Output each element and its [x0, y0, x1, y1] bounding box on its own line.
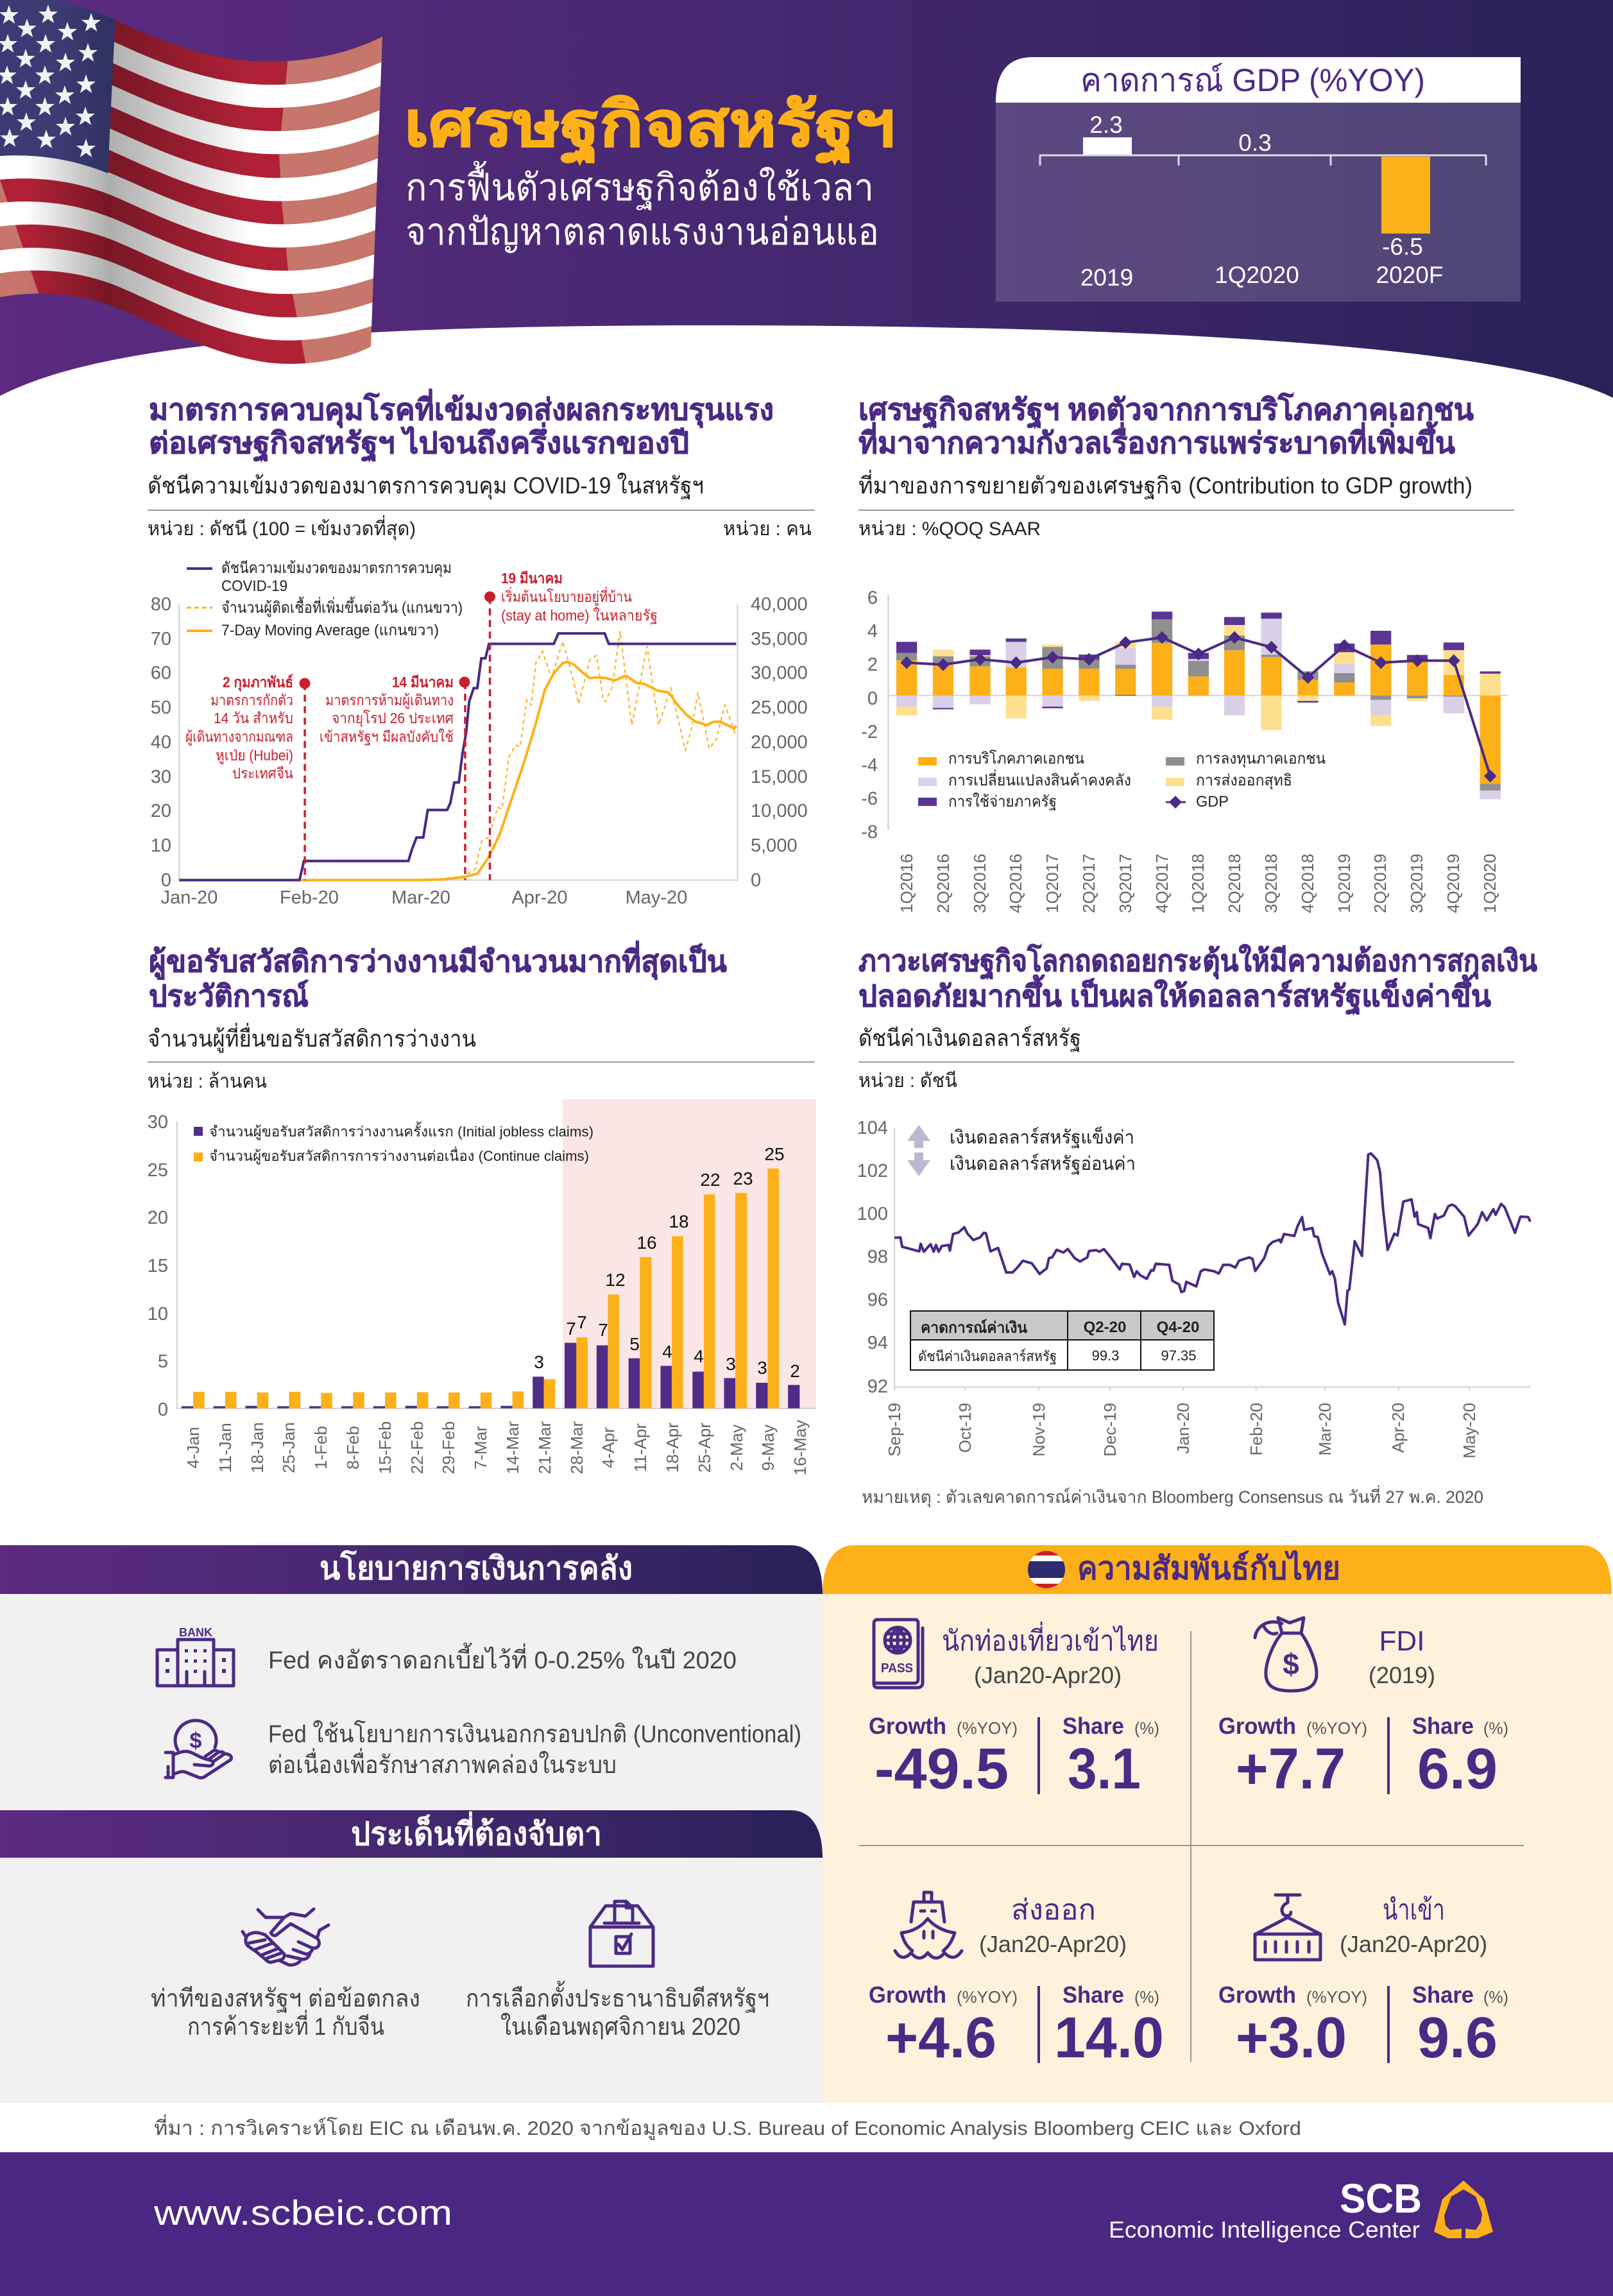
x axis labels: 9-May [758, 1425, 778, 1471]
tourists block: Growth [869, 1713, 946, 1739]
SCB wordmark: SCB [1340, 2175, 1422, 2222]
forecast table: ดัชนีค่าเงินดอลลาร์สหรัฐ [918, 1348, 1057, 1365]
GDP values: 2.3 [1089, 112, 1123, 138]
axis labels: 60 [151, 663, 171, 683]
x axis labels: 4Q2017 [1152, 853, 1172, 913]
x axis labels [885, 1403, 1479, 1459]
x axis labels: 18-Jan [248, 1422, 267, 1473]
legend: การส่งออกสุทธิ [1196, 772, 1292, 790]
icon: ship [895, 1892, 962, 1958]
x axis labels: Dec-19 [1100, 1403, 1120, 1457]
bar values: 7 [566, 1319, 576, 1339]
policy header [0, 1545, 823, 1594]
bar values: 4 [694, 1346, 704, 1366]
bar values: 4 [662, 1342, 672, 1362]
annotation: 2 February: 14 วัน สำหรับ [214, 710, 293, 726]
heading: มาตรการควบคุมโรคที่เข้มงวดส่งผลกระทบรุนแรง [149, 389, 774, 428]
imports block: Share [1412, 1982, 1474, 2008]
watch item 2: การเลือกตั้งประธานาธิบดีสหรัฐฯ [466, 1980, 769, 2013]
x axis labels: 4-Apr [599, 1427, 618, 1468]
x axis labels: 16-May [790, 1420, 810, 1475]
source note: ที่มา : การวิเคราะห์โดย EIC ณ เดือนพ.ค. 2020 จากข้อมูลของ U.S. Bureau of Economic Analysis Bloomberg CEIC และ Oxford [154, 2114, 1301, 2140]
website: www.scbeic.com [153, 2193, 452, 2232]
exports block: (%) [1134, 1987, 1159, 2007]
legend: ดัชนีความเข้มงวดของมาตรการควบคุม [221, 560, 452, 578]
exports block: Share [1063, 1982, 1124, 2008]
axis labels: 0 [161, 870, 171, 891]
x axis labels: 2Q2018 [1225, 853, 1244, 913]
axis labels: Feb-20 [280, 887, 339, 908]
exports block: (Jan20-Apr20) [979, 1931, 1127, 1957]
forecast table: 97.35 [1161, 1348, 1197, 1364]
imports block: (%YOY) [1306, 1987, 1367, 2007]
annotation: 2 February: มาตรการกักตัว [210, 692, 293, 708]
axis labels: 35,000 [751, 629, 808, 649]
bar values: 23 [733, 1169, 753, 1188]
arrow legend: เงินดอลลาร์สหรัฐแข็งค่า [950, 1126, 1134, 1149]
SCB wordmark: Economic Intelligence Center [1109, 2216, 1420, 2243]
x axis labels: 3Q2016 [970, 853, 989, 913]
forecast table: 99.3 [1092, 1348, 1119, 1364]
header background [0, 0, 1613, 411]
policy text 2: ต่อเนื่องเพื่อรักษาสภาพคล่องในระบบ [268, 1748, 617, 1779]
y axis labels: 92 [867, 1376, 888, 1397]
subheading: ดัชนีความเข้มงวดของมาตรการควบคุม COVID-19 ในสหรัฐฯ [148, 472, 704, 500]
x axis labels: 2-May [727, 1425, 746, 1471]
legend: COVID-19 [221, 578, 287, 595]
legend: การเปลี่ยนแปลงสินค้าคงคลัง [948, 769, 1131, 789]
axis labels: 30,000 [751, 663, 808, 683]
y axis labels [857, 1118, 888, 1397]
annotation: 2 February: หูเป่ย (Hubei) [216, 747, 293, 764]
y axis labels: 0 [867, 689, 878, 709]
FDI block: (%) [1483, 1718, 1508, 1738]
bar values: 7 [598, 1320, 608, 1340]
x axis labels: May-20 [1460, 1403, 1479, 1459]
stacked bar chart [888, 595, 1508, 830]
FDI block: Growth [1218, 1713, 1296, 1739]
forecast table: Q4-20 [1157, 1319, 1199, 1336]
FDI block: Share [1412, 1713, 1474, 1739]
x axis labels: Sep-19 [885, 1403, 904, 1457]
x axis labels: 15-Feb [375, 1421, 395, 1474]
heading: ภาวะเศรษฐกิจโลกถดถอยกระตุ้นให้มีความต้องการสกุลเงิน [858, 943, 1537, 980]
x axis labels: 4-Jan [183, 1426, 203, 1469]
icon: coin and hand [166, 1720, 232, 1778]
policy text 2: Fed ใช้นโยบายการเงินนอกกรอบปกติ (Unconventional) [268, 1720, 801, 1748]
x axis labels: Oct-19 [955, 1403, 975, 1453]
unit: หน่วย : ล้านคน [148, 1071, 267, 1092]
bar chart [177, 1121, 816, 1409]
legend: การบริโภคภาคเอกชน [948, 750, 1084, 767]
x axis labels [897, 853, 1499, 913]
axis labels: 0 [751, 870, 761, 891]
icon: handshake [243, 1909, 329, 1965]
axis labels: 25,000 [751, 698, 808, 718]
bar values: 2 [790, 1361, 800, 1381]
annotation: 19 March: (stay at home) ในหลายรัฐ [501, 607, 658, 624]
x axis labels: 11-Apr [631, 1423, 650, 1472]
legend: การลงทุนภาคเอกชน [1196, 750, 1326, 768]
bar values: 5 [629, 1334, 640, 1354]
panel: jobless claims [148, 941, 816, 1475]
x axis labels: 4Q2016 [1006, 853, 1025, 913]
annotation: 14 March: มาตรการห้ามผู้เดินทาง [325, 692, 454, 709]
units: หน่วย : คน [723, 518, 812, 540]
tourists block: -49.5 [875, 1737, 1009, 1801]
x axis labels: Jan-20 [1173, 1403, 1193, 1454]
watch item 1: การค้าระยะที่ 1 กับจีน [187, 2010, 384, 2041]
bar values: 25 [764, 1144, 785, 1164]
x axis labels: Mar-20 [1315, 1403, 1335, 1455]
x axis labels: 22-Feb [407, 1421, 427, 1474]
annotation: 14 March: 14 มีนาคม [392, 674, 454, 690]
annotation: 14 March [320, 674, 454, 746]
line chart: stringency and cases [179, 597, 738, 880]
x axis labels: 1Q2016 [897, 853, 916, 913]
imports block: 9.6 [1417, 2006, 1498, 2070]
legend: จำนวนผู้ขอรับสวัสดิการการว่างงานต่อเนื่อง (Continue claims) [209, 1146, 589, 1165]
highlighted period [563, 1099, 816, 1409]
tourists block: (%) [1134, 1718, 1159, 1738]
imports block: Growth [1218, 1982, 1296, 2008]
y axis labels: 94 [867, 1333, 888, 1353]
policy text 2 [268, 1720, 801, 1779]
heading: ผู้ขอรับสวัสดิการว่างงานมีจำนวนมากที่สุดเป็น [149, 941, 728, 980]
axis labels: 80 [151, 594, 171, 615]
legend: จำนวนผู้ติดเชื้อที่เพิ่มขึ้นต่อวัน (แกนขวา) [221, 596, 463, 617]
title: เศรษฐกิจสหรัฐฯ [404, 90, 895, 165]
axis labels: 70 [151, 629, 171, 649]
y axis labels: 0 [158, 1400, 168, 1420]
tourists block: 3.1 [1068, 1737, 1141, 1801]
y axis labels: 30 [148, 1112, 168, 1133]
FDI block: FDI [1379, 1625, 1424, 1657]
legend [918, 750, 1326, 810]
GDP values: 1Q2020 [1215, 262, 1299, 288]
GDP values: -6.5 [1382, 234, 1423, 260]
x axis labels: Apr-20 [1388, 1403, 1408, 1453]
panel: monetary and fiscal policy [0, 1545, 823, 2103]
FDI block: +7.7 [1236, 1737, 1345, 1801]
heading: ประวัติการณ์ [149, 979, 309, 1013]
bar values: 12 [605, 1270, 626, 1290]
GDP values: 2019 [1080, 264, 1133, 291]
tourists block: (Jan20-Apr20) [974, 1662, 1122, 1688]
x axis labels: 29-Feb [439, 1421, 458, 1474]
axis labels: Apr-20 [511, 887, 568, 908]
panel: GDP forecast [996, 57, 1521, 302]
axis labels: 5,000 [751, 835, 798, 856]
x axis labels: 1-Feb [311, 1426, 330, 1469]
x axis labels: 1Q2018 [1188, 853, 1208, 913]
y axis labels: 102 [857, 1161, 888, 1181]
y axis labels: 4 [867, 621, 878, 642]
x axis labels: 18-Apr [663, 1423, 682, 1473]
y axis labels: -6 [861, 789, 878, 809]
event markers [299, 592, 495, 689]
legend [194, 1122, 593, 1165]
icon: bank: BANK [179, 1626, 212, 1639]
heading [149, 941, 728, 1013]
axis labels: 20 [151, 801, 171, 821]
subtitle: จากปัญหาตลาดแรงงานอ่อนแอ [405, 211, 879, 253]
unit: หน่วย : %QOQ SAAR [858, 518, 1041, 540]
axis labels [151, 594, 808, 908]
y axis labels [148, 1112, 168, 1420]
bar values: 7 [577, 1312, 587, 1332]
x axis labels: 2Q2017 [1079, 853, 1098, 913]
x axis labels: 2Q2016 [934, 853, 953, 913]
line chart [894, 1128, 1530, 1391]
y axis labels: 10 [148, 1304, 168, 1324]
GDP values: 0.3 [1238, 130, 1272, 156]
title [404, 90, 895, 253]
units: หน่วย : ดัชนี (100 = เข้มงวดที่สุด) [148, 515, 416, 541]
axis labels: 10 [151, 835, 171, 856]
y axis labels: -4 [861, 755, 878, 776]
bar values [534, 1144, 800, 1381]
tourists block [869, 1620, 1159, 1801]
axis labels: Mar-20 [391, 887, 450, 908]
icon: money bag [1255, 1618, 1317, 1691]
heading: ที่มาจากความกังวลเรื่องการแพร่ระบาดที่เพิ่มขึ้น [858, 421, 1456, 459]
GDP bars [1039, 137, 1487, 234]
imports block: (%) [1483, 1987, 1508, 2007]
policy header: นโยบายการเงินการคลัง [320, 1549, 633, 1586]
exports block: 14.0 [1054, 2006, 1164, 2070]
annotation: 14 March: เข้าสหรัฐฯ มีผลบังคับใช้ [320, 728, 454, 746]
heading [858, 392, 1474, 459]
axis labels: 15,000 [751, 767, 808, 787]
annotation: 19 March: 19 มีนาคม [501, 570, 563, 587]
x axis labels: 2Q2019 [1370, 853, 1390, 913]
y axis labels: 15 [148, 1256, 168, 1276]
bar values: 16 [636, 1233, 657, 1253]
bar values: 22 [700, 1170, 721, 1190]
x axis labels: 28-Mar [567, 1421, 586, 1474]
x axis labels: Feb-20 [1247, 1403, 1266, 1455]
axis labels: 40,000 [751, 594, 808, 615]
x axis labels: 3Q2018 [1261, 853, 1281, 913]
icon: bank [157, 1626, 234, 1686]
GDP values: 2020F [1376, 262, 1443, 288]
subheading: ที่มาของการขยายตัวของเศรษฐกิจ (Contribution to GDP growth) [858, 470, 1472, 500]
icon: strengthen arrow [907, 1125, 930, 1148]
icon: SCB logo [1434, 2180, 1493, 2238]
imports block: (Jan20-Apr20) [1340, 1931, 1487, 1957]
FDI block: (2019) [1369, 1662, 1435, 1688]
y axis labels: 104 [857, 1118, 888, 1138]
panel: relations with Thailand [823, 1545, 1613, 2103]
y axis labels: 100 [857, 1204, 888, 1224]
x axis labels: 14-Mar [503, 1421, 522, 1474]
x axis labels: 3Q2019 [1407, 853, 1426, 913]
exports block [869, 1892, 1164, 2070]
GDP heading: คาดการณ์ GDP (%YOY) [1080, 62, 1425, 98]
x axis labels: 11-Jan [216, 1423, 235, 1473]
icon: money bag: $ [1283, 1647, 1299, 1681]
x axis labels: 7-Mar [471, 1426, 490, 1469]
axis labels: 10,000 [751, 801, 808, 821]
subheading: ดัชนีค่าเงินดอลลาร์สหรัฐ [858, 1025, 1081, 1052]
tourists block: (%YOY) [957, 1718, 1018, 1738]
x axis labels: 8-Feb [343, 1426, 363, 1469]
watch item 1: ท่าทีของสหรัฐฯ ต่อข้อตกลง [151, 1985, 420, 2013]
annotation: 2 February: 2 กุมภาพันธ์ [223, 674, 293, 692]
subtitle [405, 161, 879, 253]
axis labels: May-20 [626, 887, 687, 908]
panel: contribution to GDP growth [858, 392, 1514, 913]
watch header [0, 1810, 823, 1858]
y axis labels: 5 [158, 1351, 168, 1372]
y axis labels: -2 [861, 722, 878, 742]
icon: passport [874, 1620, 923, 1688]
x axis labels: 1Q2019 [1335, 853, 1354, 913]
annotation: 2 February: ประเทศจีน [232, 765, 293, 782]
annotation: 2 February: ผู้เดินทางจากมณฑล [185, 728, 293, 746]
x axis labels [183, 1420, 810, 1475]
axis labels: Jan-20 [161, 887, 218, 908]
panel: US dollar index [857, 943, 1537, 1508]
annotation: 19 March: เริ่มต้นนโยบายอยู่ที่บ้าน [501, 587, 632, 606]
panel: COVID stringency chart [148, 389, 815, 908]
y axis labels: 96 [867, 1290, 888, 1310]
bar values: 3 [534, 1352, 544, 1372]
bar values: 18 [669, 1212, 689, 1231]
footer [0, 2152, 1613, 2296]
icon: US flag [0, 0, 391, 385]
arrow legend [950, 1126, 1136, 1175]
heading: เศรษฐกิจสหรัฐฯ หดตัวจากการบริโภคภาคเอกชน [858, 392, 1474, 429]
legend: 7-Day Moving Average (แกนขวา) [221, 622, 439, 639]
icon: ballot box [590, 1901, 653, 1966]
exports block: Growth [869, 1982, 946, 2008]
x axis labels: 1Q2020 [1480, 853, 1499, 913]
watch item 2 [466, 1980, 769, 2041]
SCB wordmark [1109, 2175, 1422, 2243]
FDI block: (%YOY) [1306, 1718, 1367, 1738]
Thailand header [823, 1545, 1612, 1594]
legend: GDP [1196, 793, 1229, 810]
GDP values [1080, 112, 1443, 291]
policy text 1: Fed คงอัตราดอกเบี้ยไว้ที่ 0-0.25% ในปี 2020 [268, 1642, 737, 1674]
heading: ปลอดภัยมากขึ้น เป็นผลให้ดอลลาร์สหรัฐแข็งค่าขึ้น [858, 974, 1492, 1015]
forecast table [910, 1311, 1214, 1370]
heading [858, 943, 1537, 1015]
x axis labels: 4Q2018 [1298, 853, 1317, 913]
y axis labels: 6 [867, 588, 878, 608]
units [148, 515, 812, 541]
unit: หน่วย : ดัชนี [858, 1070, 957, 1092]
FDI block: 6.9 [1417, 1737, 1498, 1801]
x axis labels: 25-Apr [695, 1423, 714, 1473]
annotation: 19 March [501, 570, 658, 624]
note: หมายเหตุ : ตัวเลขคาดการณ์ค่าเงินจาก Bloomberg Consensus ณ วันที่ 27 พ.ค. 2020 [862, 1485, 1483, 1508]
x axis labels: 25-Jan [279, 1422, 298, 1473]
heading: ต่อเศรษฐกิจสหรัฐฯ ไปจนถึงครึ่งแรกของปี [149, 422, 689, 462]
legend: การใช้จ่ายภาครัฐ [948, 792, 1057, 810]
exports block: +4.6 [885, 2006, 996, 2070]
y axis labels [861, 588, 878, 843]
forecast table: คาดการณ์ค่าเงิน [921, 1319, 1028, 1337]
y axis labels: 2 [867, 655, 878, 675]
y axis labels: 20 [148, 1208, 168, 1228]
FDI block [1218, 1618, 1508, 1801]
tourists block: Share [1063, 1713, 1124, 1739]
legend: จำนวนผู้ขอรับสวัสดิการว่างงานครั้งแรก (Initial jobless claims) [209, 1122, 593, 1140]
arrow legend: เงินดอลลาร์สหรัฐอ่อนค่า [950, 1153, 1136, 1175]
x axis labels: 1Q2017 [1043, 853, 1062, 913]
icon: passport: PASS [881, 1661, 913, 1675]
y axis labels: -8 [861, 822, 878, 843]
subheading: จำนวนผู้ที่ยื่นขอรับสวัสดิการว่างงาน [148, 1023, 476, 1053]
icon: container crane [1255, 1895, 1320, 1960]
heading [149, 389, 774, 462]
imports block [1218, 1894, 1508, 2070]
tourists block: นักท่องเที่ยวเข้าไทย [942, 1621, 1159, 1657]
axis labels: 20,000 [751, 732, 808, 753]
bar values: 3 [757, 1358, 767, 1378]
icon: weaken arrow [907, 1152, 930, 1176]
bar values: 3 [726, 1354, 736, 1374]
Thailand header: ความสัมพันธ์กับไทย [1077, 1550, 1340, 1586]
annotation: 2 February [185, 674, 293, 782]
exports block: (%YOY) [957, 1987, 1018, 2007]
y axis labels: 25 [148, 1160, 168, 1181]
x axis labels: 21-Mar [535, 1421, 554, 1474]
icon: Thai flag [1028, 1551, 1065, 1588]
legend [187, 560, 463, 639]
axis labels: 40 [151, 732, 171, 753]
subtitle: การฟื้นตัวเศรษฐกิจต้องใช้เวลา [405, 161, 874, 210]
icon: coin and hand: $ [190, 1729, 202, 1753]
watch item 2: ในเดือนพฤศจิกายน 2020 [500, 2013, 740, 2041]
imports block: +3.0 [1236, 2006, 1347, 2070]
exports block: ส่งออก [1011, 1894, 1096, 1926]
forecast table: Q2-20 [1084, 1319, 1126, 1336]
y axis labels: 98 [867, 1247, 888, 1267]
x axis labels: Nov-19 [1029, 1403, 1048, 1457]
watch header: ประเด็นที่ต้องจับตา [351, 1812, 602, 1852]
axis labels: 30 [151, 767, 171, 787]
annotation: 14 March: จากยุโรป 26 ประเทศ [332, 710, 454, 727]
x axis labels: 4Q2019 [1444, 853, 1463, 913]
x axis labels: 3Q2017 [1116, 853, 1135, 913]
imports block: นำเข้า [1383, 1894, 1445, 1926]
axis labels: 50 [151, 698, 171, 718]
watch item 1 [151, 1985, 420, 2041]
